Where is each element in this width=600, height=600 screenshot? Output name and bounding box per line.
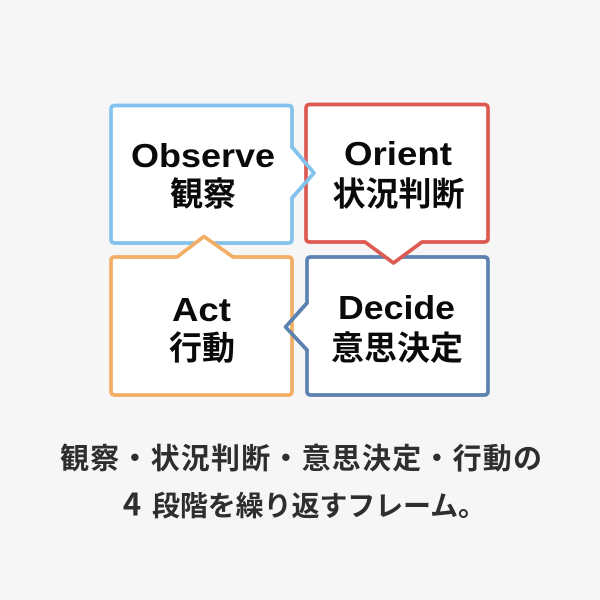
panel: Act box	[111, 236, 292, 395]
label: Orient	[332, 135, 464, 216]
label: Observe: 観察	[170, 168, 236, 216]
label: Orient: Orient	[344, 135, 452, 172]
caption text: 4	[123, 480, 141, 524]
panel: Observe box	[111, 106, 314, 243]
arrow: Observe to Orient	[292, 147, 314, 198]
panel: Orient box	[306, 104, 488, 263]
caption text: 観察・状況判断・意思決定・行動の	[60, 436, 542, 478]
label: Observe	[131, 137, 275, 216]
caption text: 段階を繰り返すフレーム。	[152, 484, 486, 524]
caption text	[60, 436, 542, 524]
label: Decide: Decide	[338, 289, 455, 326]
label: Act: 行動	[169, 322, 235, 370]
label: Orient: 状況判断	[332, 168, 464, 216]
label: Act: Act	[172, 291, 231, 328]
label: Observe: Observe	[131, 137, 275, 174]
label: Act	[169, 291, 235, 370]
label: Decide: 意思決定	[331, 322, 463, 370]
arrow: Decide to Act	[286, 303, 307, 350]
label: Decide	[331, 289, 463, 370]
panel: Decide box	[286, 257, 488, 395]
